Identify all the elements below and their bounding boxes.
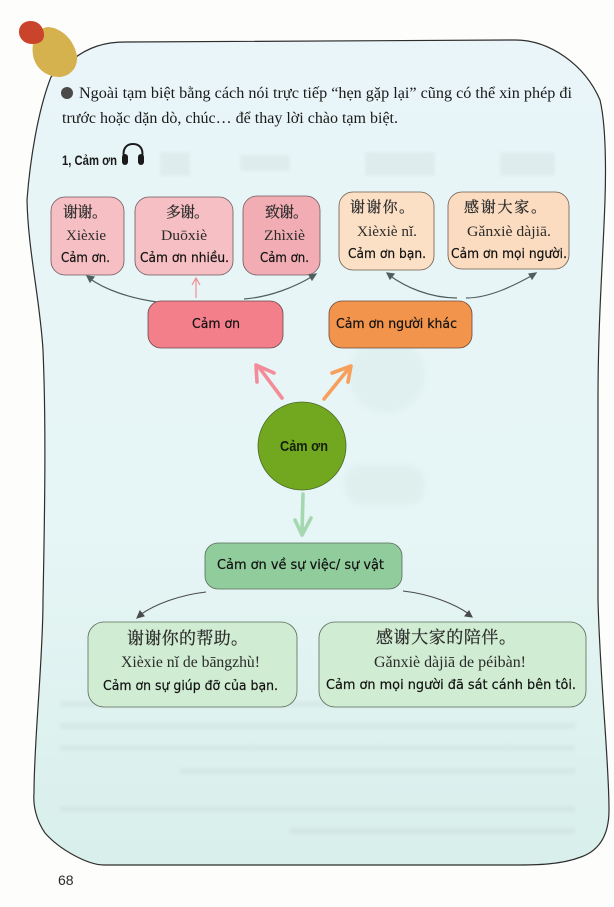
circle: Cảm ơn — [258, 402, 346, 490]
decoration: red and yellow blobs — [19, 21, 77, 77]
box: 谢谢你: Cảm ơn bạn. — [348, 247, 426, 262]
box: 致谢: 致谢。 — [265, 204, 308, 221]
arrow: to right sentence — [403, 591, 472, 617]
box: 多谢: Duōxiè — [161, 228, 207, 244]
arrow: pink to Cảm ơn — [256, 365, 282, 398]
ghost show-through from reverse page — [60, 152, 575, 834]
box: 谢谢: 谢谢。 — [63, 204, 107, 221]
box: 感谢大家的陪伴 — [319, 622, 586, 707]
intro text: trước hoặc dặn dò, chúc… để thay lời chào tạm biệt. — [62, 110, 398, 127]
box: 致谢: Cảm ơn. — [260, 251, 309, 266]
box: 感谢大家的陪伴: Cảm ơn mọi người đã sát cánh bên tôi. — [326, 678, 576, 693]
box: Cảm ơn: Cảm ơn — [192, 317, 240, 332]
box: 谢谢你的帮助 — [88, 622, 297, 707]
box: 感谢大家 — [448, 192, 569, 269]
arrow: to 多谢 — [192, 278, 200, 298]
box: 谢谢 — [51, 197, 124, 275]
box: 谢谢你: 谢谢你。 — [350, 199, 414, 216]
box: 谢谢你 — [339, 192, 434, 270]
box: 感谢大家: 感谢大家。 — [464, 198, 546, 216]
arrow: green down — [295, 494, 311, 535]
arrow: to left sentence — [137, 592, 206, 618]
box: 多谢: 多谢。 — [166, 204, 209, 221]
box: 感谢大家的陪伴: 感谢大家的陪伴。 — [376, 628, 516, 647]
box: 多谢: Cảm ơn nhiều. — [140, 251, 229, 266]
arrow: orange to Cảm ơn người khác — [324, 366, 351, 399]
arrow: to 感谢大家 — [466, 273, 536, 298]
box: 谢谢你的帮助: Cảm ơn sự giúp đỡ của bạn. — [103, 679, 278, 694]
page number: 68 — [58, 872, 74, 888]
box: 谢谢你: Xièxiè nǐ. — [357, 224, 417, 240]
icon: headphones — [122, 144, 144, 165]
box: 致谢: Zhìxiè — [264, 228, 305, 244]
arrow: to 致谢 — [244, 274, 316, 299]
arrow: to 谢谢你 — [387, 273, 457, 298]
arrow: to 谢谢 — [87, 276, 157, 302]
box: 谢谢: Xièxie — [66, 228, 106, 244]
box: Cảm ơn người khác — [329, 301, 472, 348]
box: Cảm ơn về sự việc / sự vật: Cảm ơn về sự việc/ sự vật — [217, 558, 384, 573]
box: Cảm ơn người khác: Cảm ơn người khác — [336, 317, 457, 332]
box: Cảm ơn — [148, 301, 283, 348]
box: 谢谢你的帮助: 谢谢你的帮助。 — [127, 629, 248, 648]
box: 谢谢: Cảm ơn. — [61, 251, 110, 266]
box: 谢谢你的帮助: Xièxie nǐ de bāngzhù! — [121, 654, 260, 671]
box: 致谢 — [243, 196, 320, 275]
circle: Cảm ơn: Cảm ơn — [280, 438, 328, 455]
intro text — [61, 85, 573, 127]
box: 感谢大家的陪伴: Gǎnxiè dàjiā de péibàn! — [374, 654, 526, 671]
box: 多谢 — [135, 197, 233, 275]
box: 感谢大家: Gǎnxiè dàjiā. — [467, 224, 551, 240]
box: Cảm ơn về sự việc / sự vật — [205, 543, 402, 589]
heading: 1, Cảm ơn: 1, Cảm ơn — [62, 153, 117, 168]
box: 感谢大家: Cảm ơn mọi người. — [451, 247, 567, 262]
intro text: Ngoài tạm biệt bằng cách nói trực tiếp “hẹn gặp lại” cũng có thể xin phép đi — [79, 85, 573, 102]
